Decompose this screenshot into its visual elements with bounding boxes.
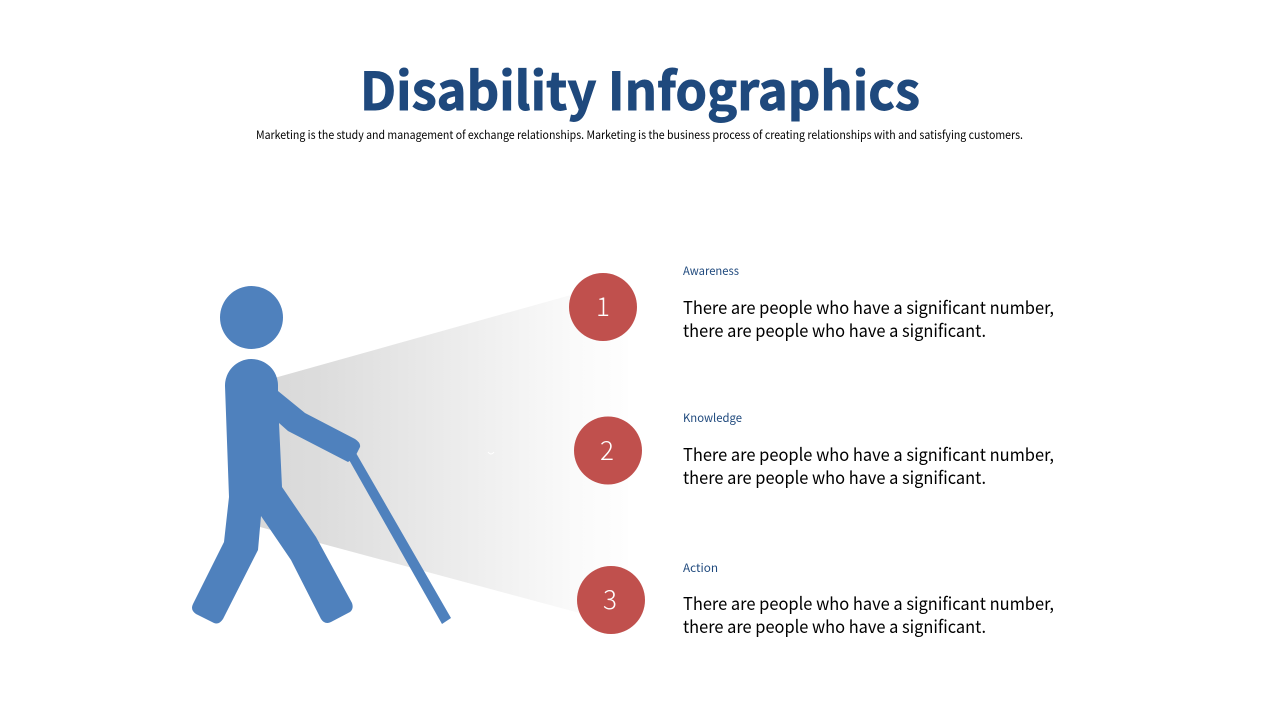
step 3 badge: [577, 566, 645, 634]
text block: action: There are people who have a significant number,: [683, 591, 1054, 616]
text block: awareness: [683, 263, 1054, 343]
step 2 badge: 2: [600, 431, 614, 468]
text block: awareness: there are people who have a significant.: [683, 318, 986, 343]
cane: [348, 453, 451, 624]
step 1 badge: 1: [596, 287, 610, 324]
step 3 badge: 3: [603, 580, 617, 617]
subtitle: Marketing is the study and management of exchange relationships. Marketing is the business process of creating relationships with and satisfying customers.: [256, 127, 1023, 143]
text block: knowledge: There are people who have a significant number,: [683, 442, 1054, 467]
text block: knowledge: Knowledge: [683, 410, 742, 426]
text block: awareness: There are people who have a significant number,: [683, 295, 1054, 320]
text block: knowledge: [683, 410, 1054, 490]
text block: action: [683, 560, 1054, 639]
step 1 badge: [569, 273, 637, 341]
text block: action: Action: [683, 560, 718, 576]
icon: person walking with cane: [192, 286, 451, 624]
text block: knowledge: there are people who have a significant.: [683, 465, 986, 490]
light beam: [260, 279, 628, 626]
text block: awareness: Awareness: [683, 263, 739, 279]
title: Disability Infographics: [360, 50, 920, 125]
head: [220, 286, 283, 349]
text block: action: there are people who have a significant.: [683, 614, 986, 639]
step 2 badge: [574, 416, 642, 484]
chevron mark: [488, 452, 494, 454]
body: [192, 359, 360, 624]
